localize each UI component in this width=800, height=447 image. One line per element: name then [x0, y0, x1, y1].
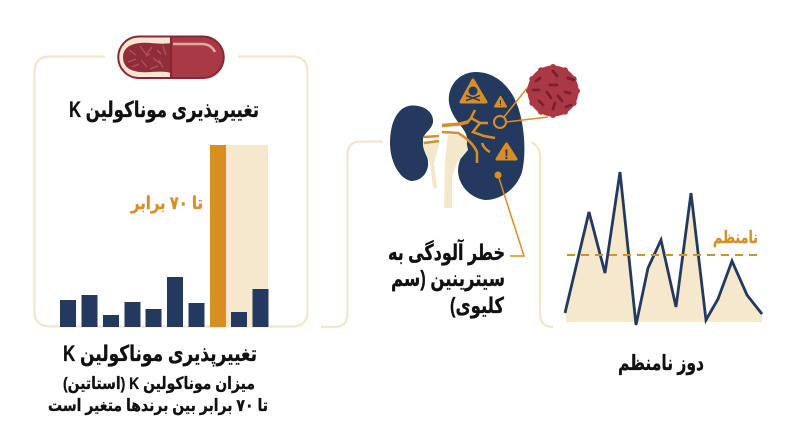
heading: panel title: تغییرپذیری موناکولین K: [69, 97, 259, 123]
text block: citrinin risk: سیترینین (سم: [391, 266, 505, 292]
icon: skull warning: [461, 80, 486, 102]
icon: magnified contaminant: [494, 64, 580, 128]
text block: citrinin risk: خطر آلودگی به: [388, 238, 505, 266]
label: irregular: نامنظم: [713, 228, 758, 247]
heading: lower title: تغییرپذیری موناکولین K: [63, 341, 257, 367]
panel: contamination frame left: [321, 142, 383, 327]
icon: red yeast rice capsule: [118, 36, 224, 78]
bar chart: monacolin levels: [60, 145, 268, 327]
text block: citrinin risk: کلیوی): [450, 293, 504, 319]
text block: citrinin risk: [388, 238, 505, 319]
panel: dose frame: [531, 142, 553, 327]
icon: large warning: !: [504, 146, 509, 162]
callout: up to 70 times: تا ۷۰ برابر: [130, 193, 203, 214]
icon: kidneys: [390, 72, 524, 208]
icon: small warning: !: [499, 99, 502, 108]
text block: description: [48, 374, 268, 416]
text block: description: تا ۷۰ برابر بین برندها متغیر است: [48, 396, 268, 416]
text block: description: میزان موناکولین K (استاتین): [63, 374, 255, 394]
leader line: contamination risk: [494, 172, 524, 256]
line chart: irregular dose: [565, 172, 762, 325]
panel: monacolin variability frame: [34, 56, 308, 326]
heading: irregular dose: دوز نامنظم: [618, 352, 704, 375]
